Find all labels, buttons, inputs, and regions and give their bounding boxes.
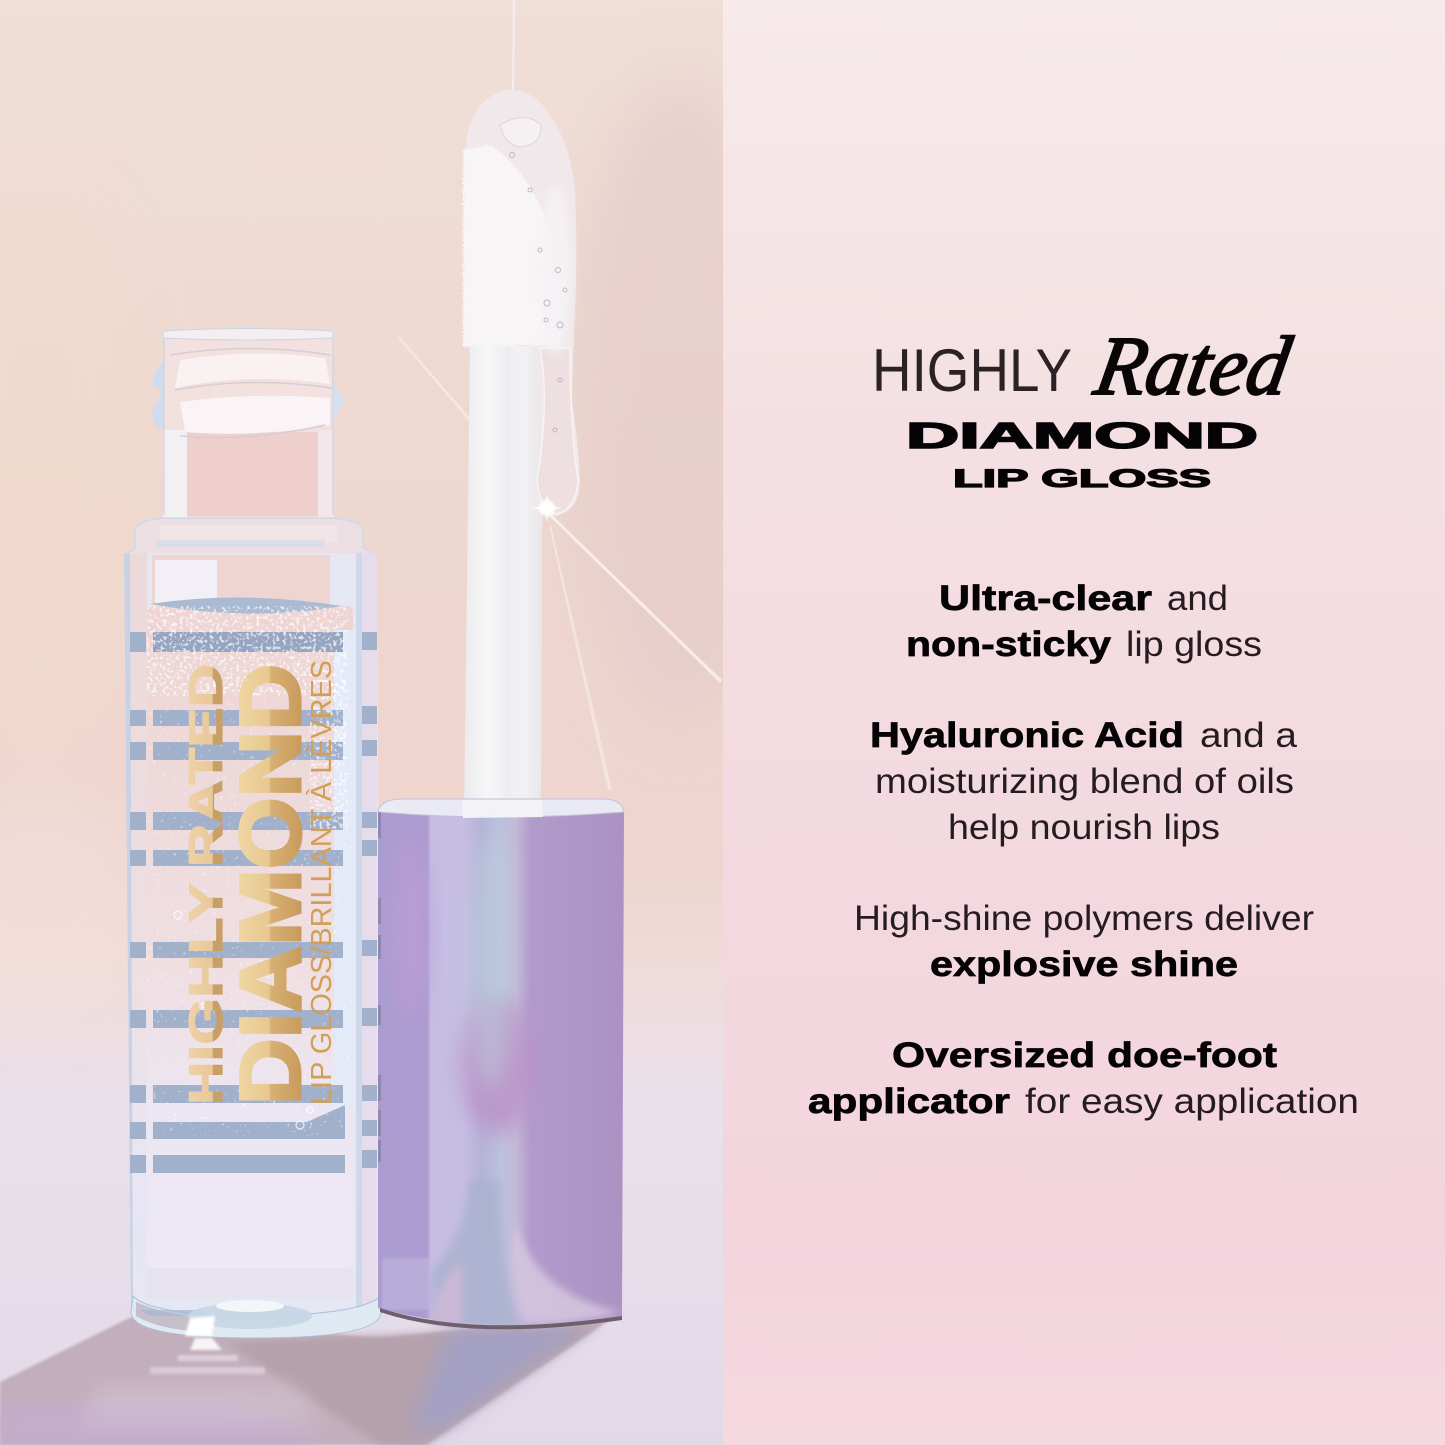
label: Lip Gloss / Brillant a levres: LIP GLOSS/BRILLANT À LÈVRES bbox=[305, 660, 338, 1105]
text block: high-shine bbox=[854, 899, 1314, 984]
text block: ultra-clear: and bbox=[1167, 579, 1228, 618]
gloss thread bbox=[513, 0, 514, 96]
applicator stem bbox=[464, 346, 543, 815]
heading: Highly Rated: Rated bbox=[1088, 321, 1298, 413]
glitter in gel bbox=[147, 606, 352, 1142]
text block: hyaluronic acid: moisturizing blend of oils bbox=[875, 762, 1294, 801]
doe-foot flock bbox=[463, 145, 560, 347]
text block: hyaluronic acid: and a bbox=[1200, 716, 1298, 755]
heading: Lip Gloss: LIP GLOSS bbox=[953, 465, 1211, 493]
heading: Highly Rated: HIGHLY bbox=[872, 337, 1072, 404]
text block: ultra-clear: non-sticky bbox=[906, 625, 1112, 664]
text block: oversized applicator: applicator bbox=[808, 1082, 1010, 1121]
heading: Highly Rated bbox=[872, 321, 1298, 413]
clear gloss bbox=[466, 90, 580, 516]
drop sparkle bbox=[532, 494, 562, 522]
text block: hyaluronic acid bbox=[870, 716, 1298, 847]
text block: hyaluronic acid: help nourish lips bbox=[948, 808, 1220, 847]
label: Highly Rated: HIGHLY RATED bbox=[179, 664, 232, 1105]
text block: oversized applicator: Oversized doe-foot bbox=[892, 1036, 1277, 1075]
text block: oversized applicator bbox=[808, 1036, 1359, 1121]
bottle collar bbox=[124, 518, 378, 555]
text block: ultra-clear: Ultra-clear bbox=[939, 579, 1152, 618]
text block: hyaluronic acid: Hyaluronic Acid bbox=[870, 716, 1184, 755]
light flares bbox=[398, 337, 722, 790]
cap bbox=[378, 799, 624, 1329]
panel: product photo bbox=[0, 0, 790, 1445]
applicator wand tip with gloss bbox=[463, 0, 580, 516]
text block: oversized applicator: for easy application bbox=[1025, 1082, 1359, 1121]
caustic light stripes bbox=[80, 1338, 320, 1425]
text block: ultra-clear bbox=[906, 579, 1262, 664]
text block: ultra-clear: lip gloss bbox=[1126, 625, 1262, 664]
text block: high-shine: explosive shine bbox=[930, 945, 1238, 984]
text block: high-shine: High-shine polymers deliver bbox=[854, 899, 1314, 938]
lip gloss bottle bbox=[124, 328, 381, 1338]
glass base bbox=[131, 1296, 381, 1338]
panel: product details bbox=[723, 0, 1445, 1445]
heading: Diamond: DIAMOND bbox=[906, 415, 1258, 456]
floor shadow bbox=[0, 1313, 620, 1445]
bottle neck bbox=[152, 328, 345, 521]
bottle body bbox=[124, 553, 381, 1338]
label: Diamond: DIAMOND bbox=[223, 664, 319, 1105]
label reflection stripes bbox=[130, 632, 377, 1173]
